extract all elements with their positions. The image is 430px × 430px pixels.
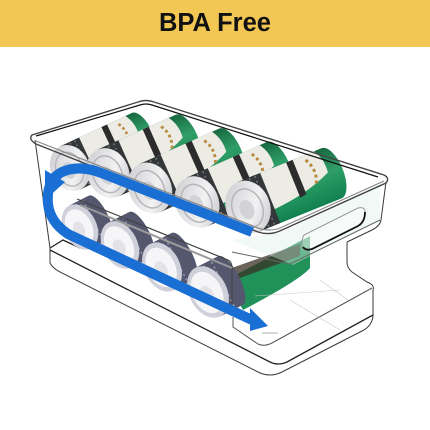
blue rotation arrow <box>45 168 268 331</box>
lower row of cans <box>54 192 310 325</box>
heading banner: BPA Free <box>0 0 430 47</box>
bottom tray outline <box>35 140 386 375</box>
lower tray floor <box>233 280 372 345</box>
handle cut-out <box>302 208 365 250</box>
upper row of cans <box>42 109 353 240</box>
upper shelf rim <box>31 100 388 316</box>
heading banner: BPA Free: BPA Free <box>159 9 271 37</box>
